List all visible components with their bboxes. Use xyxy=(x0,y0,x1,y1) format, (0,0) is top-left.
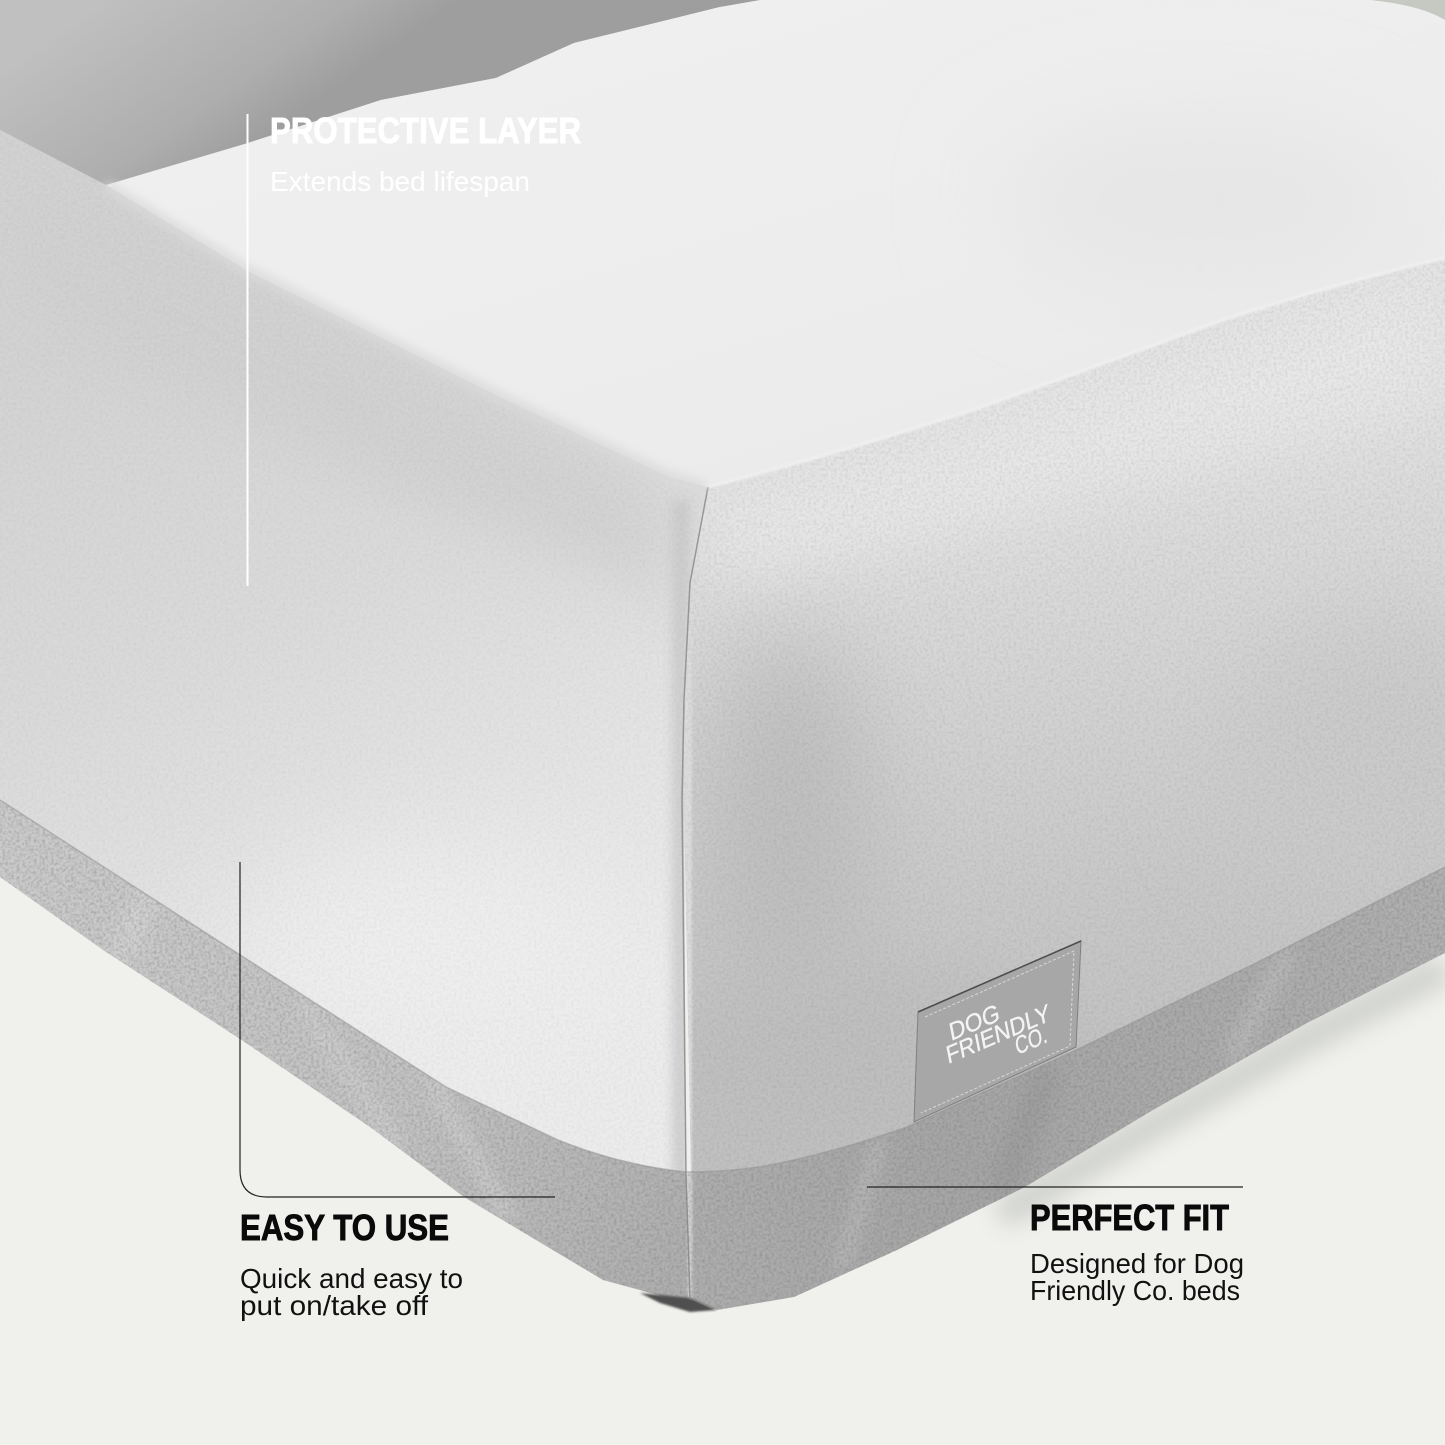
right wall shading xyxy=(670,262,1445,1180)
callout line xyxy=(246,114,248,586)
description: Designed for Dog xyxy=(1030,1248,1244,1279)
callout: perfect fit xyxy=(867,1187,1244,1306)
base shadow xyxy=(640,1293,717,1312)
callout line xyxy=(867,1186,1243,1188)
description xyxy=(240,1263,463,1321)
label top edge shadow xyxy=(918,941,1081,1012)
floor shadow xyxy=(1000,968,1445,1215)
heading: PERFECT FIT xyxy=(1030,1197,1229,1238)
band seam shadow xyxy=(0,800,1445,1172)
label stitching xyxy=(921,951,1074,1113)
description: put on/take off xyxy=(240,1290,428,1321)
callout: protective layer xyxy=(248,110,581,586)
cushion shading xyxy=(1000,120,1400,280)
callout: easy to use xyxy=(240,862,555,1321)
bottom band right xyxy=(691,867,1445,1310)
soft cushion boundary xyxy=(106,186,705,487)
left wall xyxy=(0,130,708,1172)
description: Friendly Co. beds xyxy=(1030,1275,1240,1306)
bottom band left xyxy=(0,800,691,1303)
left wall shading xyxy=(0,130,700,1180)
right wall xyxy=(684,258,1445,1172)
band folds xyxy=(0,790,1445,1320)
cushion xyxy=(106,0,1445,495)
back bolster xyxy=(0,0,780,186)
brand label patch xyxy=(914,941,1081,1122)
description: Extends bed lifespan xyxy=(270,166,530,197)
description: Quick and easy to xyxy=(240,1263,463,1294)
label fabric xyxy=(914,941,1081,1122)
corner seam xyxy=(682,487,708,1300)
callout line xyxy=(240,862,555,1197)
heading: PROTECTIVE LAYER xyxy=(270,110,581,151)
description xyxy=(1030,1248,1244,1306)
label text: FRIENDLY xyxy=(944,999,1052,1070)
heading: EASY TO USE xyxy=(240,1207,449,1248)
top right floor corner xyxy=(1100,0,1445,20)
bolster highlight edge xyxy=(708,258,1445,487)
label text: CO. xyxy=(1013,1021,1049,1061)
label text: DOG xyxy=(947,999,1002,1047)
